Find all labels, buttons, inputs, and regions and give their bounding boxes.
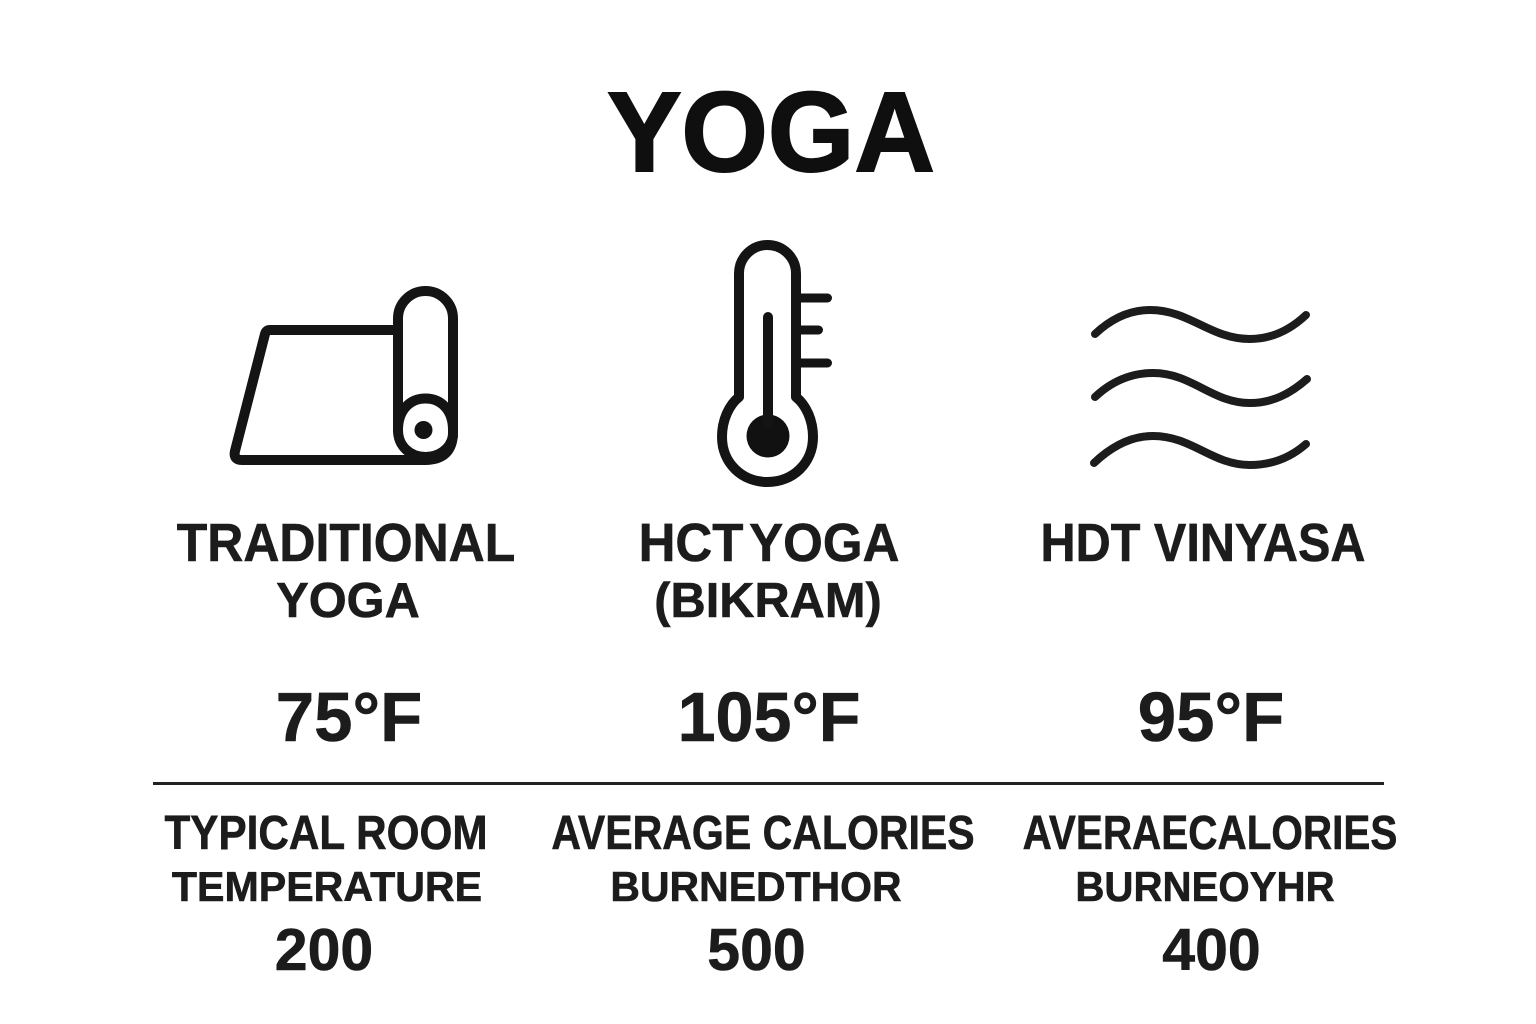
caption: burned per hour: BURNEDTHOR [610, 863, 902, 910]
caption: typical room: TYPICAL ROOM [164, 807, 487, 860]
value: 500: 500 [707, 917, 806, 983]
divider line [153, 782, 1384, 784]
value: 400: 400 [1162, 917, 1261, 983]
temperature: 75: 75°F [275, 678, 422, 756]
label: hot yoga: HCT YOGA [638, 513, 899, 573]
temperature: 95: 95°F [1138, 678, 1284, 756]
caption: temperature: TEMPERATURE [171, 863, 482, 910]
label: bikram: (BIKRAM) [654, 573, 881, 628]
caption: burned third: BURNEOYHR [1075, 863, 1334, 910]
icon: yoga mat [230, 286, 458, 465]
value: 200: 200 [275, 917, 373, 983]
caption: average calories third: AVERAECALORIES [1023, 807, 1397, 860]
label: traditional yoga: TRADITIONAL [177, 513, 515, 573]
icon: waves [1090, 306, 1311, 469]
caption: average calories: AVERAGE CALORIES [551, 807, 974, 860]
label: hot vinyasa: HDT VINYASA [1041, 513, 1365, 573]
temperature: 105: 105°F [678, 678, 860, 756]
icon: thermometer [717, 240, 832, 487]
title: YOGA [607, 69, 934, 196]
label: yoga line two: YOGA [276, 573, 420, 628]
